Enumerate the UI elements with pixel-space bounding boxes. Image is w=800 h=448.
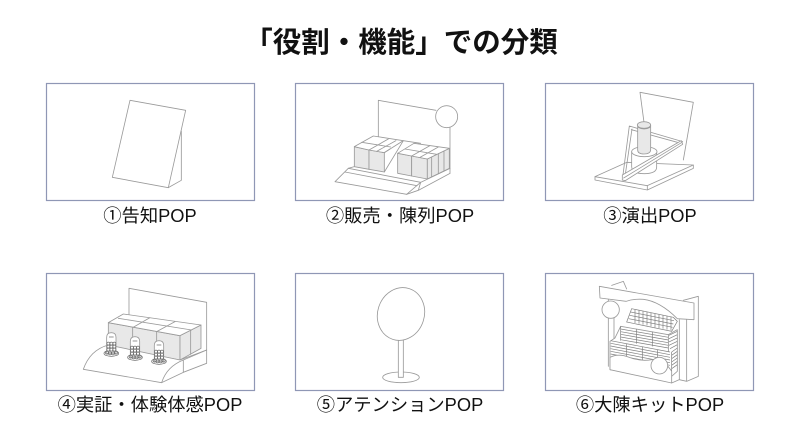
panel: アテンションPOP bbox=[296, 274, 504, 390]
panel: 販売・陳列POP bbox=[296, 84, 504, 200]
title: 「役割・機能」での分類 bbox=[244, 27, 558, 59]
panel: 大陳キットPOP bbox=[546, 274, 754, 390]
panel: 実証・体験体感POP bbox=[46, 274, 254, 390]
label: アテンションPOP: ⑤アテンションPOP bbox=[317, 394, 483, 415]
icon: tent card bbox=[112, 100, 186, 188]
label: 告知POP: ①告知POP bbox=[103, 205, 197, 226]
panel: 演出POP bbox=[546, 84, 754, 200]
icon: large display kit bbox=[599, 281, 698, 383]
icon: sales tray display bbox=[335, 100, 458, 194]
label: 大陳キットPOP: ⑥大陳キットPOP bbox=[576, 394, 724, 415]
label: 販売・陳列POP: ②販売・陳列POP bbox=[326, 205, 474, 226]
icon: round sign on stand bbox=[371, 281, 431, 383]
panel: 告知POP bbox=[46, 84, 254, 200]
label: 実証・体験体感POP: ④実証・体験体感POP bbox=[58, 394, 242, 415]
icon: trial display with samples bbox=[83, 288, 207, 383]
icon: staged display with frame bbox=[595, 92, 693, 190]
label: 演出POP: ③演出POP bbox=[603, 205, 697, 226]
